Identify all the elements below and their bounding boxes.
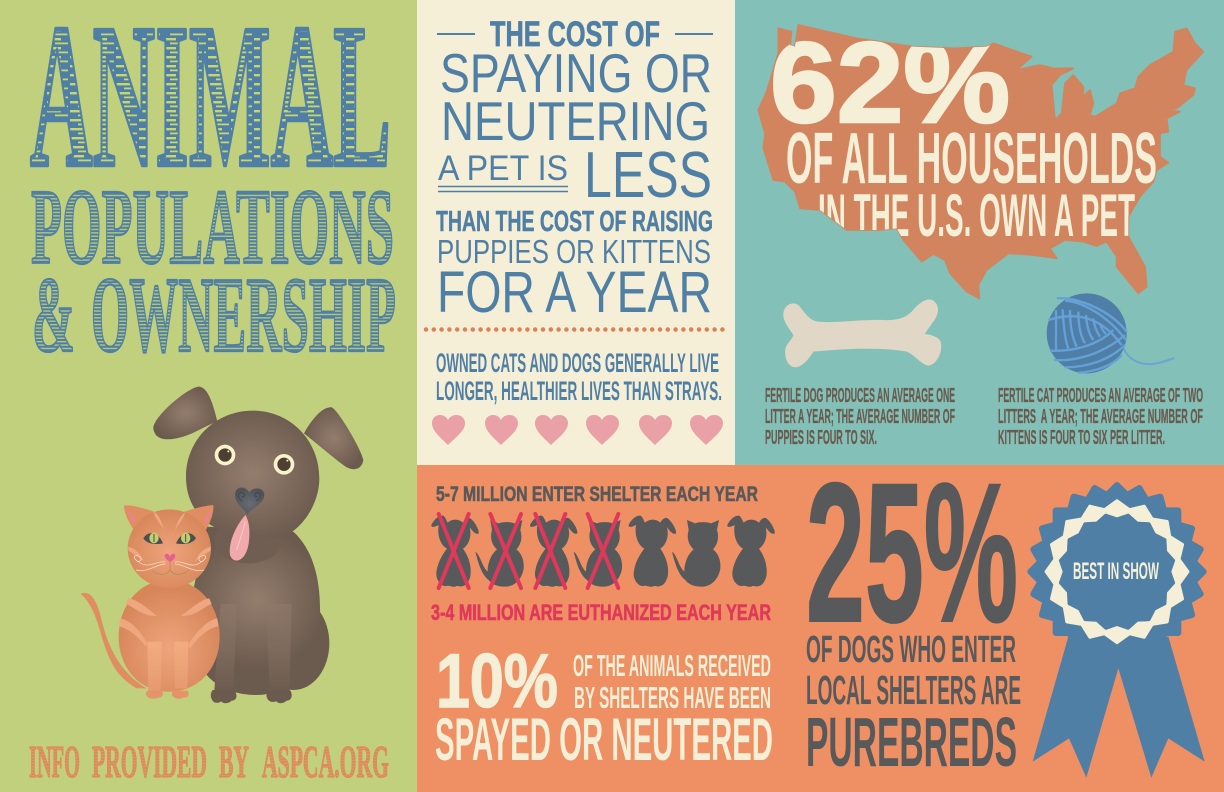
- pictogram: pets in shelters: [431, 514, 775, 588]
- text: POPULATIONS: [31, 168, 394, 287]
- rosette outer: [1026, 481, 1208, 663]
- double rule under a pet is: [438, 186, 568, 192]
- cat forehead stripes: [128, 512, 211, 562]
- text: dog fertility: [765, 385, 955, 449]
- dog left ear: [153, 387, 217, 439]
- text: LITTER A YEAR; THE AVERAGE NUMBER OF: [765, 406, 955, 428]
- cat whiskers: [134, 556, 206, 571]
- text: FERTILE DOG PRODUCES AN AVERAGE ONE: [765, 385, 955, 407]
- heart 3: [535, 415, 568, 445]
- text: less: LESS: [584, 138, 712, 211]
- icon: yarn ball: [1047, 293, 1174, 373]
- dog tongue: [230, 515, 249, 561]
- credit text: INFO: [29, 736, 80, 787]
- ribbon tails: [1033, 637, 1205, 778]
- credit text: PROVIDED: [92, 736, 207, 787]
- red crosses: [439, 514, 618, 588]
- dog jaw: [214, 518, 282, 563]
- dog head: [186, 411, 319, 538]
- stat: 62% households: [773, 40, 1156, 236]
- dog right leg: [266, 604, 292, 695]
- rosette inner: [1060, 515, 1174, 628]
- dog nose: [235, 488, 264, 514]
- cat tail: [81, 593, 147, 688]
- dog left eye: [215, 445, 235, 465]
- dog silhouette 3: [530, 516, 577, 587]
- icon: best in show ribbon: [1026, 481, 1208, 778]
- cost panel text: [436, 15, 713, 325]
- number: 25%: 25%: [806, 442, 1018, 663]
- text: neutering: NEUTERING: [441, 90, 710, 152]
- line: of dogs who enter: OF DOGS WHO ENTER: [806, 629, 1016, 671]
- cat mouth: [153, 563, 188, 574]
- dotted divider: [426, 327, 728, 332]
- text: than the cost of raising: THAN THE COST OF RAISING: [436, 206, 713, 238]
- title: [30, 0, 396, 375]
- cat silhouette 2: [475, 520, 524, 587]
- text: OWNED CATS AND DOGS GENERALLY LIVE: [436, 348, 719, 378]
- cat nose: [165, 554, 175, 563]
- dog silhouette 5: [629, 516, 676, 587]
- icon: bone: [783, 299, 941, 367]
- cat silhouette 6: [672, 520, 720, 587]
- panel: cream background: [417, 0, 735, 465]
- heart 4: [586, 415, 619, 445]
- heading rule left: [437, 33, 475, 35]
- rosette cream ring: [1046, 501, 1188, 643]
- dog right eye: [274, 454, 294, 475]
- heart 5: [639, 415, 672, 445]
- number: 10%: 10%: [436, 639, 558, 724]
- text: euthanized: 3-4 MILLION ARE EUTHANIZED EACH YEAR: [431, 600, 771, 625]
- dog silhouette 1: [431, 516, 479, 587]
- cat stripes: [119, 598, 218, 648]
- text: OF THE ANIMALS RECEIVED: [573, 648, 771, 683]
- dog left leg: [214, 604, 237, 695]
- text: shelter entries: 5-7 MILLION ENTER SHELTER EACH YEAR: [436, 483, 758, 506]
- hearts row: [432, 415, 723, 445]
- dog silhouette 7: [727, 516, 775, 587]
- stat: 25% purebreds: [806, 442, 1021, 781]
- credit text: BY: [219, 736, 249, 787]
- credit text: [29, 736, 389, 787]
- panel: orange background: [417, 465, 1224, 792]
- text: puppies or kittens: PUPPIES OR KITTENS: [437, 233, 711, 270]
- illustration: dog: [153, 387, 363, 703]
- text: BY SHELTERS HAVE BEEN: [574, 680, 771, 715]
- heart 2: [485, 415, 518, 445]
- yarn sphere: [1047, 293, 1127, 373]
- dog left paw: [211, 690, 236, 703]
- stat: 10% spayed: [435, 639, 773, 773]
- cat silhouette 4: [574, 520, 622, 587]
- US map: [758, 25, 1203, 298]
- text: OWNERSHIP: [91, 256, 396, 375]
- yarn tail: [1122, 345, 1174, 364]
- text: LONGER, HEALTHIER LIVES THAN STRAYS.: [436, 376, 722, 406]
- text: spaying or: SPAYING OR: [440, 42, 712, 104]
- yarn strands: [1048, 298, 1127, 373]
- dog right paw: [266, 690, 292, 703]
- text: for a year: FOR A YEAR: [437, 260, 712, 325]
- cat legs: [147, 642, 188, 692]
- illustration: cat: [81, 505, 220, 699]
- text: SPAYED OR NEUTERED: [435, 706, 773, 773]
- panel: green background: [0, 0, 417, 792]
- cat paws: [146, 691, 189, 699]
- cat ears: [124, 505, 213, 532]
- cat eyes: [143, 533, 196, 544]
- heading rule right: [675, 33, 713, 35]
- dog body: [193, 527, 320, 695]
- dog right ear: [304, 407, 363, 469]
- strays text: [436, 348, 722, 406]
- cat inner ears: [127, 509, 212, 524]
- heart 6: [690, 415, 723, 445]
- cat body: [119, 580, 220, 692]
- text: dog fertility: PUPPIES IS FOUR TO SIX.: [765, 427, 877, 449]
- dog haunch: [257, 597, 329, 690]
- cat head: [128, 509, 211, 588]
- heart 1: [432, 415, 465, 445]
- text: ASPCA.ORG: [262, 736, 389, 787]
- text: cat fertility: [998, 385, 1203, 449]
- title: &: [32, 256, 75, 375]
- text: a pet is: A PET IS: [438, 149, 568, 188]
- number: 62%: 62%: [770, 20, 1010, 147]
- panel: teal background: [735, 0, 1224, 465]
- heading: the cost of: THE COST OF: [490, 15, 660, 54]
